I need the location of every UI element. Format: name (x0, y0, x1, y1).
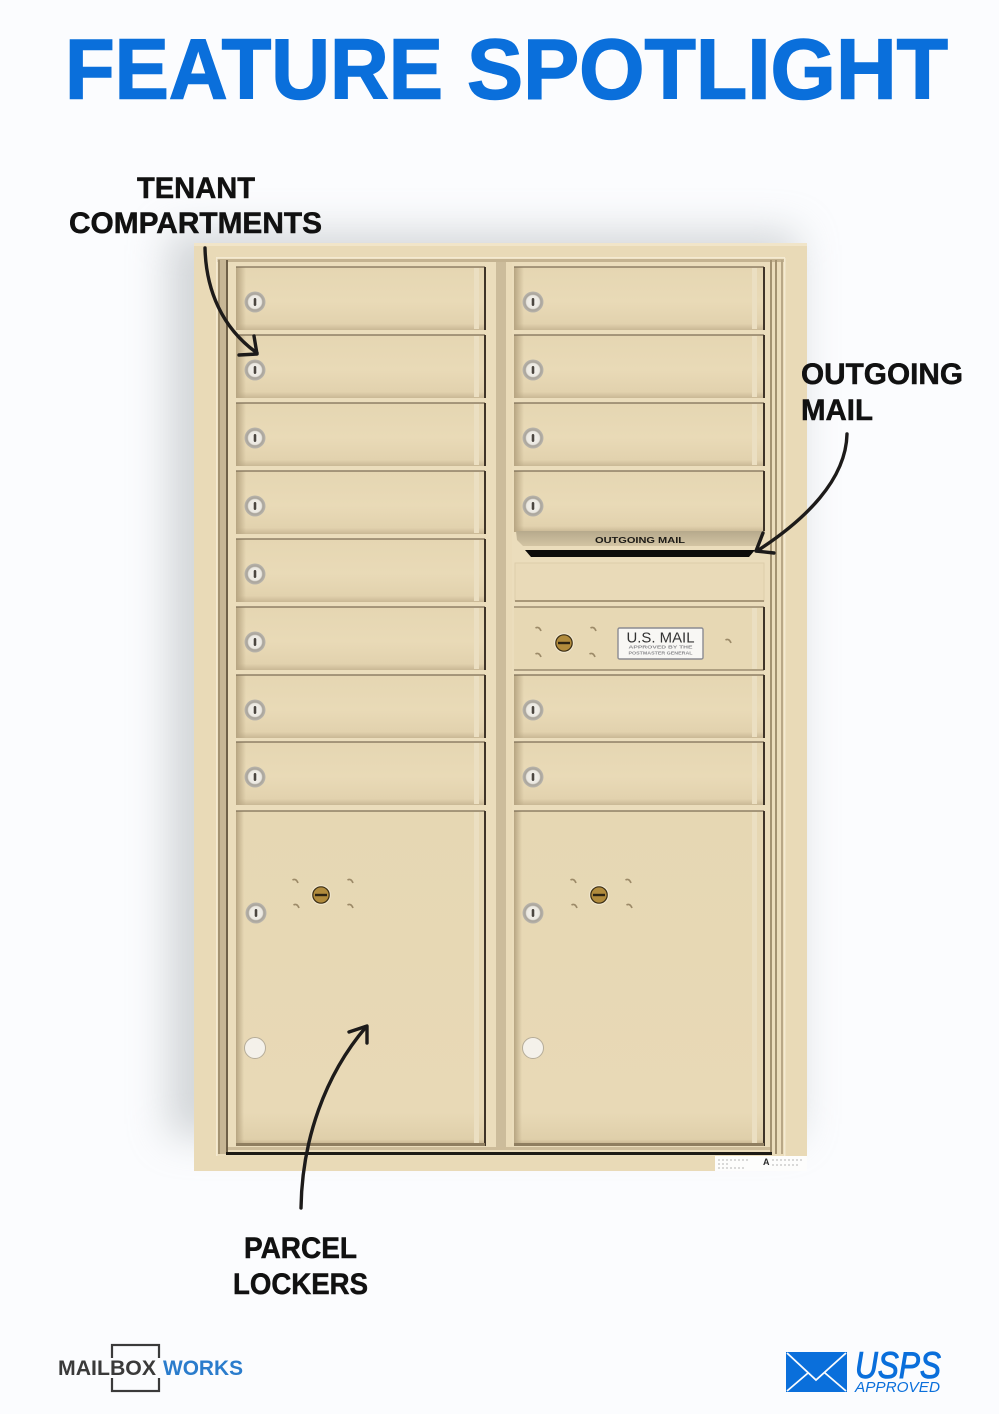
outgoing mail flap (515, 531, 765, 602)
logo: USPS Approved: APPROVED (854, 1379, 940, 1396)
logo: USPS Approved: USPS (855, 1345, 941, 1386)
icon: envelope (786, 1352, 847, 1392)
label: parcel lockers: PARCEL (244, 1232, 357, 1265)
outgoing mail flap: OUTGOING MAIL (595, 535, 685, 545)
title: SPOTLIGHT (467, 22, 948, 118)
logo: Mailbox Works: MAILBOX (58, 1357, 156, 1380)
arrow: tenant compartments (205, 248, 257, 355)
title: FEATURE (65, 22, 443, 118)
tenant door locks (244, 292, 544, 924)
logo: Mailbox Works: WORKS (163, 1357, 243, 1380)
title (65, 22, 948, 118)
inner frame rails (216, 257, 786, 1156)
mailbox unit (168, 232, 807, 1171)
manufacturer label (715, 1156, 807, 1171)
brass locks (292, 627, 731, 908)
label: parcel lockers: LOCKERS (233, 1268, 368, 1301)
U.S. Mail plate: APPROVED BY THE (628, 644, 692, 650)
U.S. Mail plate: U.S. MAIL (626, 630, 694, 646)
big parcel doors (236, 811, 765, 1146)
label: tenant compartments: COMPARTMENTS (69, 207, 322, 240)
label: tenant compartments: TENANT (137, 172, 255, 205)
unit drop shadow (168, 232, 798, 1137)
label: parcel lockers (233, 1232, 368, 1301)
arrow: parcel lockers (301, 1026, 367, 1208)
label: outgoing mail: MAIL (801, 394, 873, 427)
label: tenant compartments (69, 172, 322, 240)
logo: Mailbox Works (58, 1345, 243, 1391)
outer frame (194, 243, 807, 1171)
parcel door finger holes (244, 1038, 544, 1058)
arrow: outgoing mail (756, 434, 847, 553)
manufacturer label: A (763, 1157, 770, 1167)
logo: USPS Approved (786, 1345, 941, 1396)
label: outgoing mail: OUTGOING (801, 358, 963, 391)
label: outgoing mail (801, 358, 963, 427)
right column doors (514, 267, 765, 805)
left column doors (236, 267, 486, 805)
U.S. Mail plate: POSTMASTER GENERAL (628, 650, 693, 656)
U.S. Mail plate (618, 628, 703, 659)
